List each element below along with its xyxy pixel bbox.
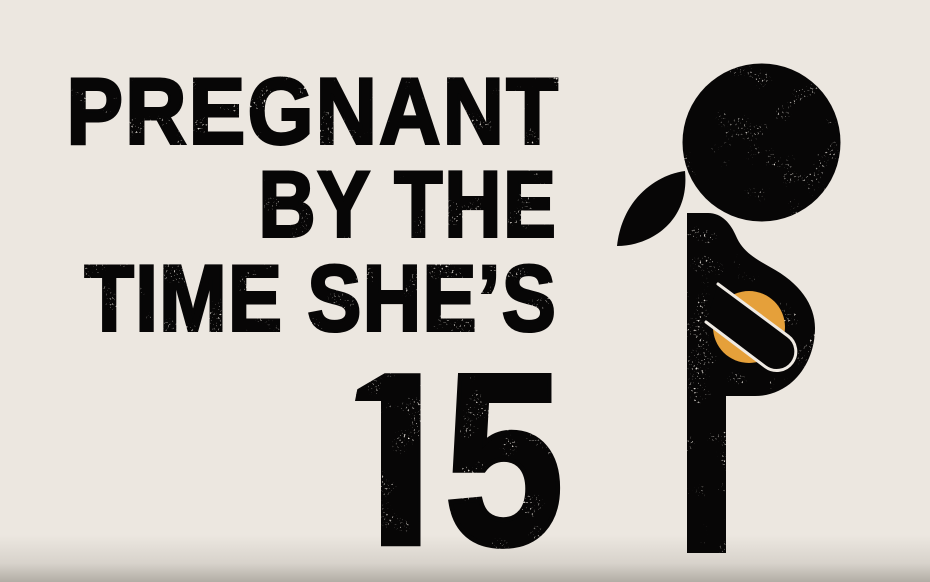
title line 1: PREGNANT [66,58,558,163]
title line 3: TIME SHE’S [84,246,556,351]
icon: body [687,213,815,553]
icon: ponytail [617,171,685,246]
big number 15 [355,373,560,549]
title: pregnant by the time she's [66,58,558,351]
bottom edge shadow [0,535,930,582]
icon: arm [706,284,796,371]
icon: orange baby circle [713,291,785,363]
icon: head [682,64,840,222]
title line 2: BY THE [258,152,556,257]
pregnant figure icon [617,64,840,553]
